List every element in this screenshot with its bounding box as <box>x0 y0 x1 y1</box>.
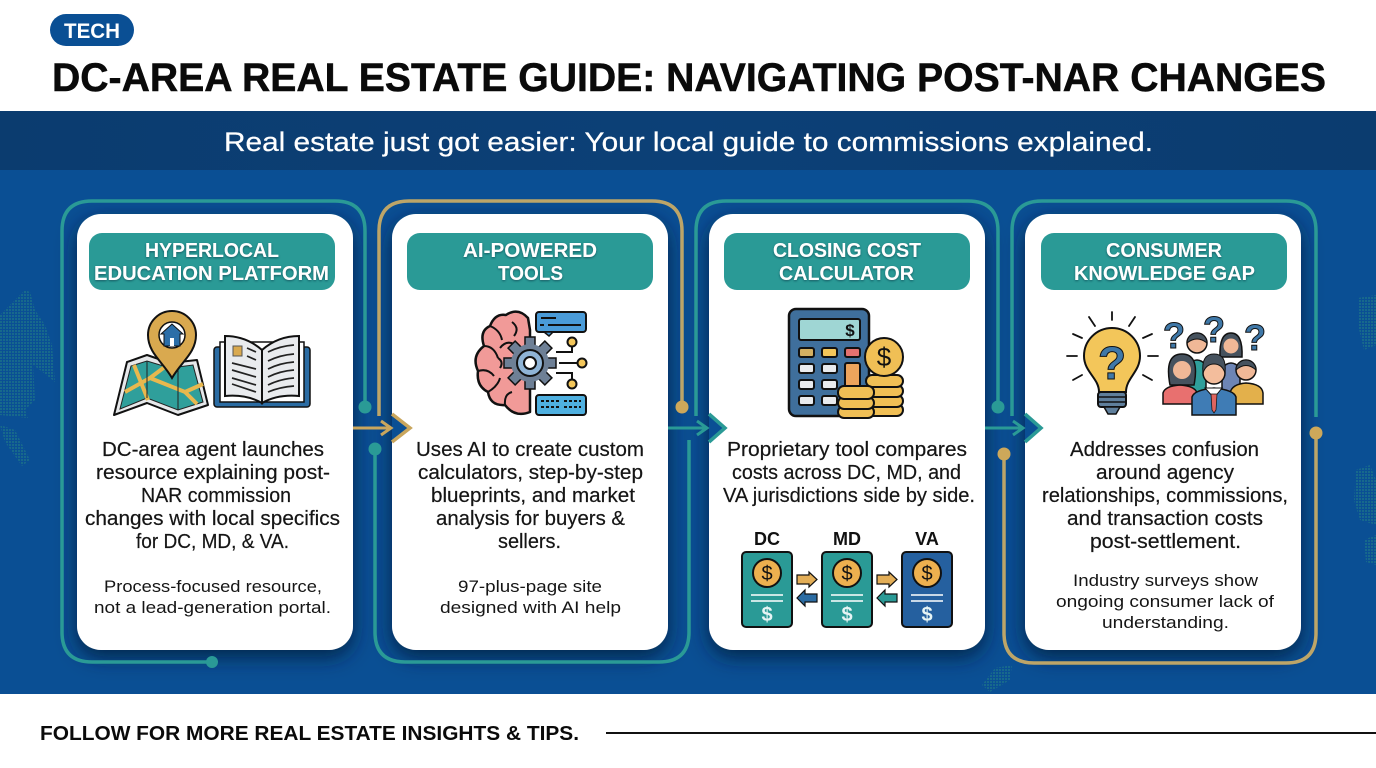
heading pill: CONSUMER <box>1106 240 1223 262</box>
panel: AI-powered tools <box>392 214 668 650</box>
footer call to action: FOLLOW FOR MORE REAL ESTATE INSIGHTS & TIPS. <box>40 723 579 745</box>
text: description: analysis for buyers & <box>436 508 626 530</box>
VA cost card <box>902 529 952 627</box>
MD cost card: $ <box>841 604 853 626</box>
text: description <box>85 439 340 553</box>
text: description: and transaction costs <box>1067 508 1263 530</box>
text: note <box>1056 571 1274 632</box>
MD cost card: $ <box>841 563 853 585</box>
VA cost card: $ <box>921 604 933 626</box>
text: note <box>94 577 331 617</box>
heading pill: AI-POWERED <box>463 240 597 262</box>
text: description: for DC, MD, & VA. <box>136 531 289 553</box>
icon: confused group of people <box>1163 309 1266 415</box>
text: note: Industry surveys show <box>1073 571 1259 590</box>
connector: card 4 gold lower frame <box>998 426 1322 663</box>
arrows DC to MD <box>797 572 817 606</box>
panel: hyperlocal education platform <box>77 214 353 650</box>
text: description: VA jurisdictions side by side. <box>723 485 975 507</box>
category tag <box>50 14 134 46</box>
MD cost card <box>822 529 872 627</box>
heading pill <box>89 233 335 290</box>
connector: card 1 teal frame <box>62 201 372 668</box>
text: description: costs across DC, MD, and <box>732 462 961 484</box>
main blue background <box>0 170 1376 694</box>
text: description: Addresses confusion <box>1070 439 1259 461</box>
text: note <box>440 577 621 617</box>
heading pill: TOOLS <box>498 263 563 285</box>
arrows MD to VA <box>877 572 897 606</box>
icon: calculator with coins: $ <box>845 321 855 340</box>
icon: light bulb with question mark <box>1067 312 1158 414</box>
text: note: not a lead-generation portal. <box>94 598 331 617</box>
heading pill: CLOSING COST <box>773 240 921 262</box>
icon: map with location pin <box>114 311 208 415</box>
DC cost card: DC <box>754 529 780 549</box>
connector: card 2 gold frame <box>379 201 688 416</box>
text: description: around agency <box>1096 462 1234 484</box>
icon: light bulb with question mark: ? <box>1098 337 1126 389</box>
DC cost card: $ <box>761 604 773 626</box>
icon: confused group of people: ? <box>1244 317 1266 358</box>
heading pill <box>1041 233 1287 290</box>
heading pill <box>724 233 970 290</box>
icon: open book <box>214 336 310 407</box>
panel: consumer knowledge gap <box>1025 214 1301 650</box>
text: note: Process-focused resource, <box>104 577 322 596</box>
MD cost card: MD <box>833 529 861 549</box>
DC cost card <box>742 529 792 627</box>
heading pill <box>407 233 653 290</box>
connector: card 4 teal frame <box>1012 201 1316 417</box>
background map texture <box>0 290 1376 692</box>
arrow: card 3 to card 4 <box>985 414 1041 442</box>
VA cost card: $ <box>921 563 933 585</box>
text: description: calculators, step-by-step <box>418 462 643 484</box>
text: description: relationships, commissions, <box>1042 485 1288 507</box>
arrow: card 2 to card 3 <box>668 414 725 442</box>
icon: confused group of people: ? <box>1203 309 1225 350</box>
icon: confused group of people: ? <box>1163 315 1185 356</box>
text: note: designed with AI help <box>440 598 621 617</box>
text: description: sellers. <box>498 531 561 553</box>
text: description: blueprints, and market <box>431 485 635 507</box>
text: description <box>1042 439 1288 553</box>
icon: calculator with coins: $ <box>877 342 892 372</box>
text: description: post-settlement. <box>1090 531 1241 553</box>
text: note: understanding. <box>1102 613 1229 632</box>
text: description: DC-area agent launches <box>102 439 324 461</box>
panel: closing cost calculator <box>709 214 985 650</box>
text: description: changes with local specifics <box>85 508 340 530</box>
heading pill: HYPERLOCAL <box>145 240 279 262</box>
heading pill: EDUCATION PLATFORM <box>94 263 329 285</box>
DC cost card: $ <box>761 563 773 585</box>
heading pill: CALCULATOR <box>779 263 915 285</box>
title: DC-AREA REAL ESTATE GUIDE: NAVIGATING POST-NAR CHANGES <box>52 56 1326 100</box>
heading pill: KNOWLEDGE GAP <box>1074 263 1255 285</box>
arrow: card 1 to card 2 <box>353 414 410 442</box>
text: description <box>723 439 975 507</box>
connector: card 3 teal frame <box>696 201 1004 416</box>
subtitle band <box>0 111 1376 170</box>
category tag: TECH <box>64 20 120 43</box>
text: note: ongoing consumer lack of <box>1056 592 1274 611</box>
subtitle band: Real estate just got easier: Your local guide to commissions explained. <box>224 127 1153 157</box>
VA cost card: VA <box>915 529 939 549</box>
text: description: resource explaining post- <box>96 462 330 484</box>
text: description: NAR commission <box>141 485 291 507</box>
text: description: Proprietary tool compares <box>727 439 967 461</box>
icon: calculator with coins <box>789 309 903 418</box>
jurisdiction comparison graphic <box>742 529 952 627</box>
text: description <box>416 439 644 553</box>
text: note: 97-plus-page site <box>458 577 602 596</box>
connector: card 2 teal lower frame <box>368 440 689 662</box>
text: description: Uses AI to create custom <box>416 439 644 461</box>
icon: brain with gear and circuits <box>476 312 586 415</box>
